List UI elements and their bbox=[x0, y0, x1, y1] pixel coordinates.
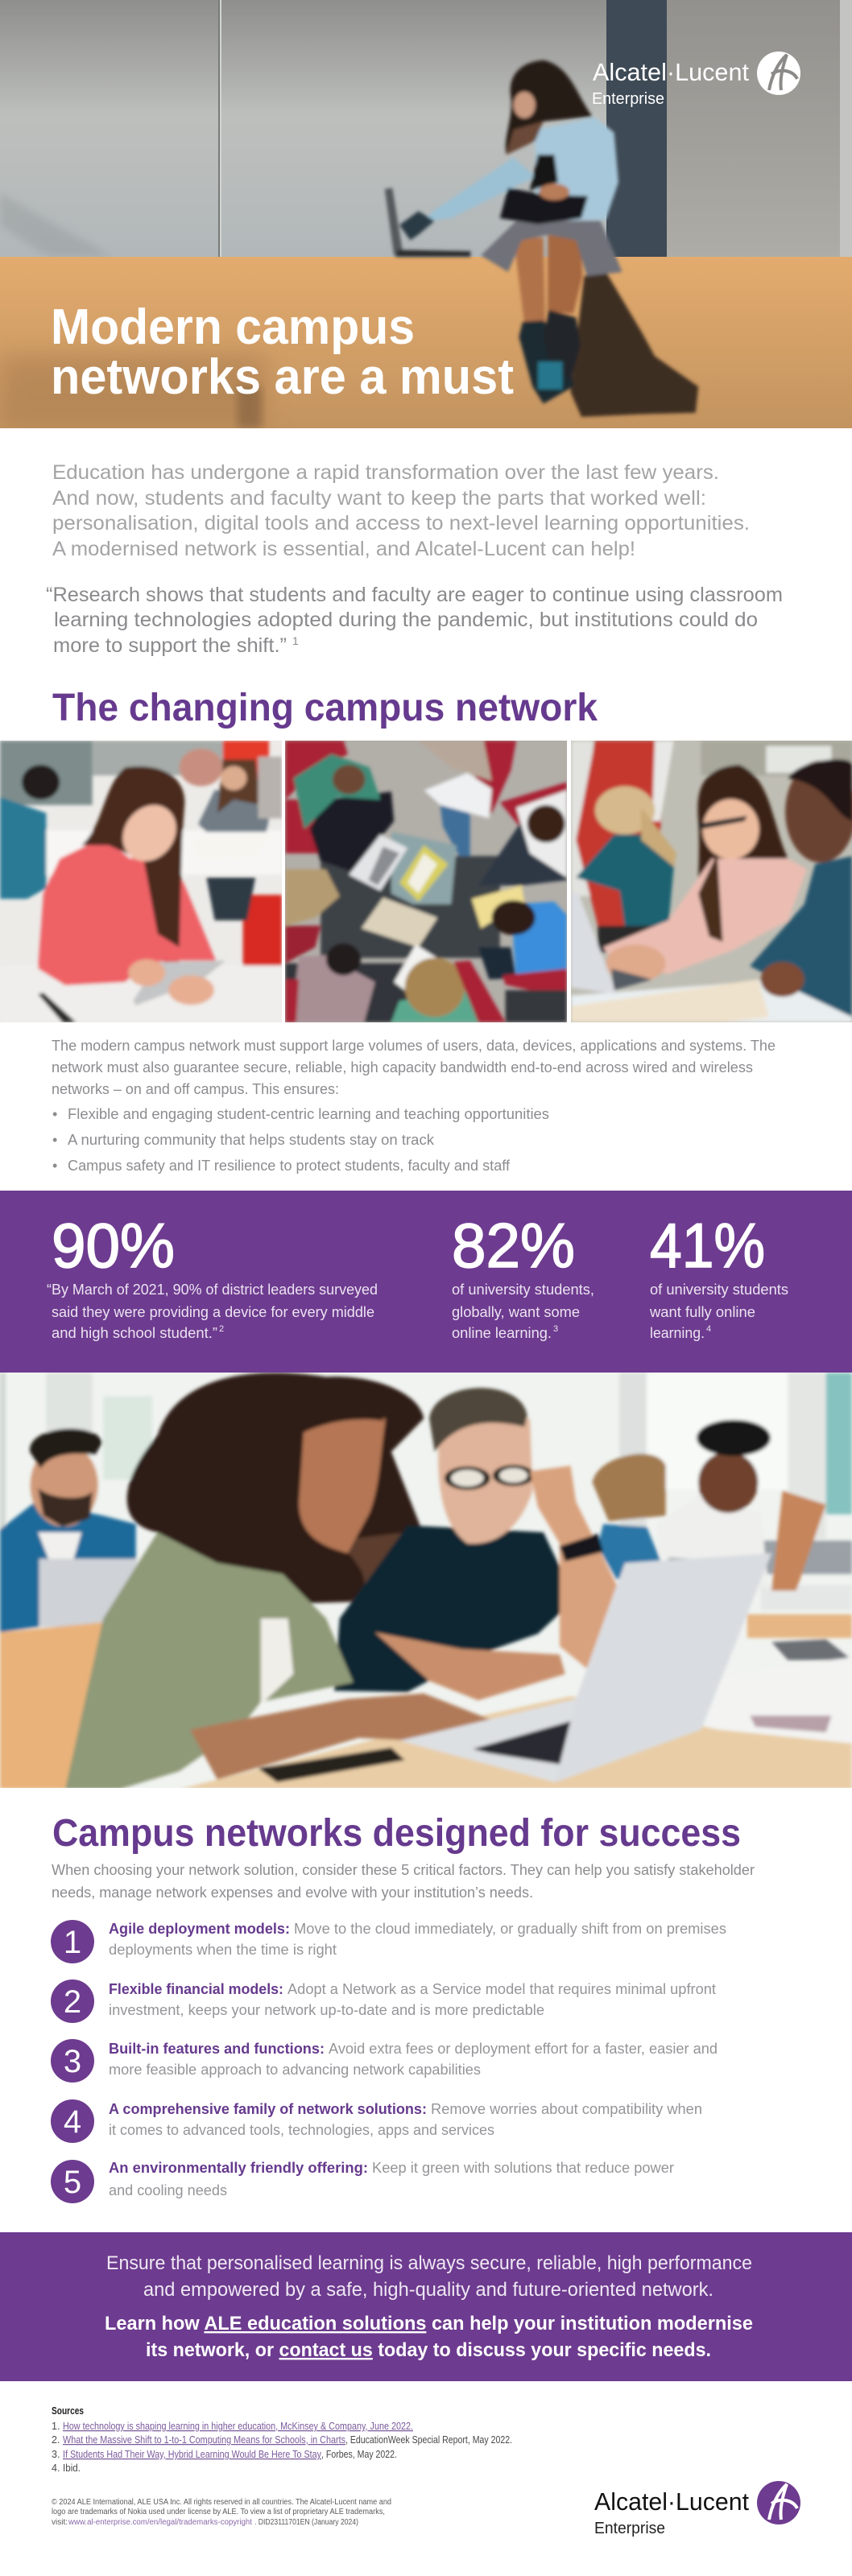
stat: 41% bbox=[649, 1210, 788, 1341]
body paragraph: network must also guarantee secure, reliable, high capacity bandwidth end-to-end across wired and wireless bbox=[52, 1059, 753, 1075]
factor 3: more feasible approach to advancing network capabilities bbox=[109, 2062, 481, 2078]
number badge 3: 3 bbox=[64, 2044, 81, 2079]
stats band bbox=[0, 1191, 852, 1373]
number badge 4: 4 bbox=[64, 2104, 81, 2140]
sources: What the Massive Shift to 1-to-1 Computing Means for Schools, in Charts bbox=[63, 2434, 345, 2446]
copyright notice: www.al-enterprise.com/en/legal/trademarks-copyright bbox=[68, 2518, 252, 2527]
stat: 90% bbox=[47, 1210, 378, 1341]
body paragraph bbox=[52, 1038, 775, 1097]
factor 1 bbox=[51, 1920, 726, 1963]
copyright notice bbox=[52, 2498, 391, 2527]
stat: 41%: 4 bbox=[706, 1324, 711, 1334]
factor 5: An environmentally friendly offering: bbox=[109, 2160, 368, 2176]
call to action: Learn how ALE education solutions can help your institution modernise bbox=[105, 2313, 753, 2334]
factor 1: Agile deployment models: bbox=[109, 1921, 290, 1937]
intro paragraph: A modernised network is essential, and Alcatel-Lucent can help! bbox=[52, 538, 635, 560]
top bbox=[530, 155, 558, 191]
logo: white Alcatel-Lucent Enterprise: Enterprise bbox=[592, 90, 664, 108]
bullet list bbox=[52, 1106, 549, 1174]
sources: 4. bbox=[52, 2462, 60, 2474]
heading: the changing campus network: The changing campus network bbox=[52, 687, 598, 729]
hero title: Modern campus bbox=[51, 299, 415, 355]
section intro bbox=[52, 1862, 755, 1901]
stat: 41%: 41% bbox=[650, 1210, 765, 1281]
factor 4: it comes to advanced tools, technologies, apps and services bbox=[109, 2122, 494, 2138]
factor 2: Flexible financial models: bbox=[109, 1981, 283, 1997]
factor 4: Remove worries about compatibility when bbox=[431, 2101, 702, 2117]
stat: 41%: of university students bbox=[650, 1282, 788, 1298]
logo: Alcatel-Lucent Enterprise footer bbox=[594, 2481, 800, 2537]
copyright notice: © 2024 ALE International, ALE USA Inc. All rights reserved in all countries. The Alcatel-Lucent name and bbox=[52, 2498, 391, 2507]
quote: learning technologies adopted during the pandemic, but institutions could do bbox=[54, 609, 758, 631]
book bbox=[500, 188, 588, 225]
number badge 2 bbox=[51, 1979, 94, 2023]
section intro: needs, manage network expenses and evolve with your institution’s needs. bbox=[52, 1885, 533, 1901]
intro paragraph bbox=[52, 461, 750, 560]
logo: white Alcatel-Lucent Enterprise: Alcatel·Lucent bbox=[593, 58, 749, 86]
jacket bbox=[536, 118, 618, 221]
number badge 1 bbox=[51, 1920, 94, 1963]
stat: 90%: and high school student.” bbox=[52, 1325, 217, 1341]
factor 5: Keep it green with solutions that reduce power bbox=[372, 2160, 674, 2176]
number badge 5 bbox=[51, 2160, 94, 2203]
stat: 90%: 2 bbox=[219, 1324, 224, 1334]
stat: 41%: want fully online bbox=[649, 1304, 755, 1320]
hair bbox=[506, 60, 593, 155]
intro paragraph: personalisation, digital tools and access to next-level learning opportunities. bbox=[52, 512, 750, 535]
intro paragraph: And now, students and faculty want to keep the parts that worked well: bbox=[52, 487, 706, 510]
sources: , Forbes, May 2022. bbox=[321, 2449, 397, 2460]
quote: more to support the shift.” bbox=[53, 634, 287, 657]
stat: 82%: globally, want some bbox=[452, 1304, 580, 1320]
factor 2 bbox=[51, 1979, 716, 2023]
body paragraph: networks – on and off campus. This ensures: bbox=[52, 1081, 339, 1097]
body paragraph: The modern campus network must support large volumes of users, data, devices, applications and systems. The bbox=[52, 1038, 775, 1054]
number badge 3 bbox=[51, 2039, 94, 2083]
number badge 5: 5 bbox=[64, 2165, 81, 2200]
factor 1: Move to the cloud immediately, or gradually shift from on premises bbox=[294, 1921, 726, 1937]
skirt bbox=[481, 221, 622, 276]
sources: 2. bbox=[52, 2434, 60, 2446]
factor 2: investment, keeps your network up-to-date and is more predictable bbox=[109, 2002, 544, 2018]
quote: 1 bbox=[292, 634, 299, 647]
cast shadow bbox=[571, 272, 698, 417]
call to action: its network, or contact us today to discuss your specific needs. bbox=[146, 2339, 711, 2361]
sources: 3. bbox=[52, 2449, 60, 2460]
factor 3: Built-in features and functions: bbox=[109, 2041, 325, 2057]
factor 5: and cooling needs bbox=[109, 2182, 227, 2198]
call to action band bbox=[0, 2232, 852, 2381]
hero banner bbox=[0, 0, 852, 428]
sources bbox=[52, 2405, 512, 2474]
stat: 82% bbox=[452, 1210, 594, 1341]
stat: 90%: said they were providing a device for every middle bbox=[52, 1304, 374, 1320]
sources: 1. bbox=[52, 2421, 60, 2432]
bullet list: • bbox=[52, 1132, 57, 1148]
factor 1: deployments when the time is right bbox=[109, 1942, 337, 1958]
stat: 82%: 3 bbox=[553, 1324, 558, 1334]
bullet list: • bbox=[52, 1106, 57, 1122]
hero title: networks are a must bbox=[51, 349, 514, 405]
factor 4 bbox=[51, 2099, 702, 2143]
closing statement bbox=[106, 2252, 752, 2301]
logo: Alcatel-Lucent Enterprise footer: Alcatel·Lucent bbox=[594, 2487, 749, 2516]
photo: students at laptop bbox=[571, 741, 852, 1022]
stat: 82%: 82% bbox=[452, 1210, 575, 1281]
stat: 90%: 90% bbox=[52, 1210, 175, 1281]
bullet list: • bbox=[52, 1158, 57, 1174]
bullet list: Flexible and engaging student-centric learning and teaching opportunities bbox=[68, 1106, 549, 1122]
factor 3 bbox=[51, 2039, 718, 2083]
logo: Alcatel-Lucent Enterprise footer: Enterprise bbox=[594, 2520, 665, 2537]
closing statement: and empowered by a safe, high-quality and future-oriented network. bbox=[143, 2279, 713, 2301]
stat: 82%: of university students, bbox=[452, 1282, 594, 1298]
intro paragraph: Education has undergone a rapid transformation over the last few years. bbox=[52, 461, 719, 484]
stat: 82%: online learning. bbox=[452, 1325, 552, 1341]
number badge 1: 1 bbox=[64, 1925, 81, 1960]
bullet list: Campus safety and IT resilience to protect students, faculty and staff bbox=[68, 1158, 511, 1174]
closing statement: Ensure that personalised learning is always secure, reliable, high performance bbox=[106, 2252, 752, 2274]
copyright notice: visit: bbox=[52, 2518, 68, 2527]
section intro: When choosing your network solution, consider these 5 critical factors. They can help you satisfy stakeholder bbox=[52, 1862, 755, 1878]
sources: How technology is shaping learning in higher education, McKinsey & Company, June 2022. bbox=[63, 2421, 413, 2432]
sources: Sources bbox=[52, 2405, 84, 2417]
factor 3: Avoid extra fees or deployment effort for a faster, easier and bbox=[329, 2041, 718, 2057]
sources: Ibid. bbox=[63, 2462, 81, 2474]
call to action bbox=[105, 2313, 753, 2361]
factor 4: A comprehensive family of network solutions: bbox=[109, 2101, 427, 2117]
heading: campus networks designed for success: Campus networks designed for success bbox=[52, 1812, 741, 1855]
number badge 2: 2 bbox=[64, 1984, 81, 2020]
factor 5 bbox=[51, 2160, 674, 2203]
hero title bbox=[51, 299, 514, 405]
quote: “Research shows that students and faculty are eager to continue using classroom bbox=[46, 584, 783, 606]
copyright notice: logo are trademarks of Nokia used under license by ALE. To view a list of proprietary ALE trademarks, bbox=[52, 2508, 385, 2516]
stat: 41%: learning. bbox=[650, 1325, 705, 1341]
bullet list: A nurturing community that helps students stay on track bbox=[68, 1132, 435, 1148]
photo: students collaborating at laptop bbox=[0, 1373, 852, 1790]
skates bbox=[519, 320, 573, 403]
laptop bbox=[385, 188, 403, 255]
logo: white Alcatel-Lucent Enterprise bbox=[592, 52, 800, 108]
number badge 4 bbox=[51, 2099, 94, 2143]
quote bbox=[46, 584, 783, 657]
photo: student with tablet bbox=[0, 741, 282, 1022]
legs bbox=[514, 237, 545, 323]
factor 2: Adopt a Network as a Service model that requires minimal upfront bbox=[287, 1981, 716, 1997]
stat: 90%: “By March of 2021, 90% of district leaders surveyed bbox=[47, 1282, 378, 1298]
copyright notice: . DID23111701EN (January 2024) bbox=[254, 2518, 358, 2527]
sources: , EducationWeek Special Report, May 2022. bbox=[345, 2434, 512, 2446]
sources: If Students Had Their Way, Hybrid Learning Would Be Here To Stay bbox=[63, 2449, 322, 2460]
photo: group studying from above bbox=[285, 741, 567, 1022]
hero photo: student on ledge bbox=[0, 0, 852, 428]
